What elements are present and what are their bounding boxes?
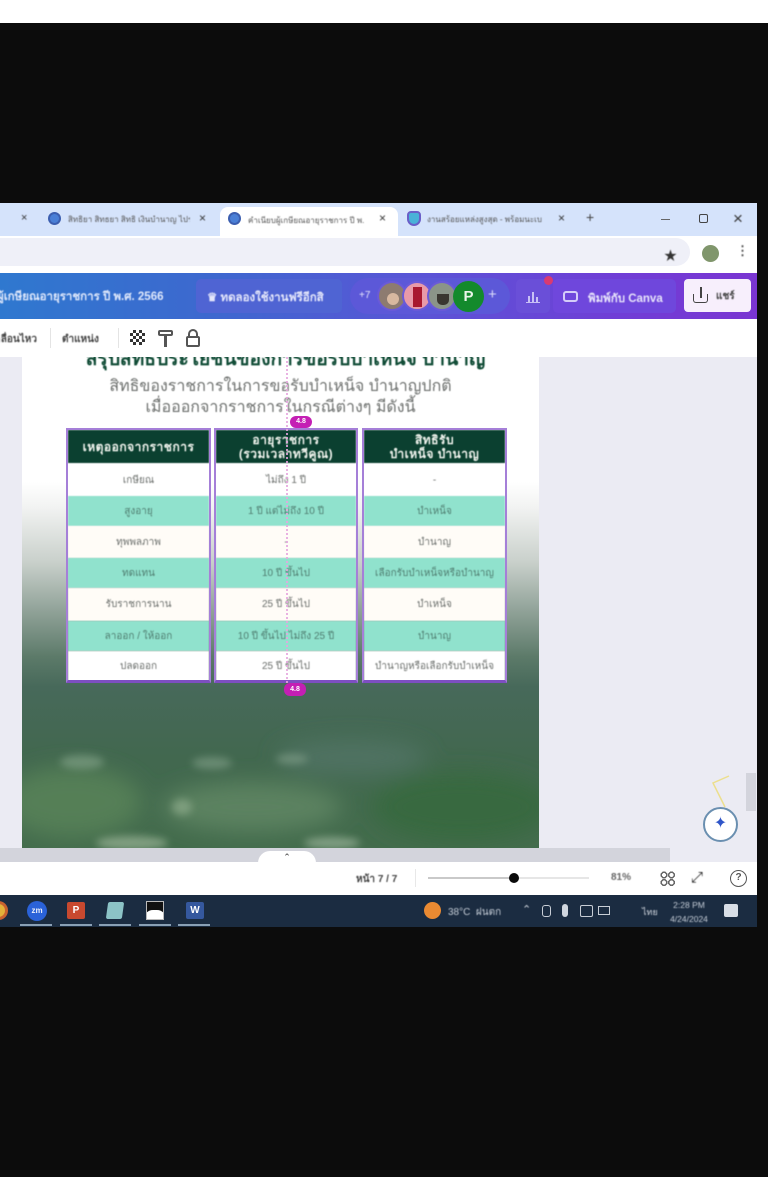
row 7: ปลดออก — [120, 660, 157, 672]
icon: weather — [424, 902, 441, 919]
row 1: เกษียณ — [123, 475, 154, 486]
header: entitlement — [364, 430, 505, 463]
clock: 2:28 PM — [673, 900, 705, 910]
print button — [553, 279, 676, 313]
scroll gutter — [0, 848, 670, 862]
header: entitlement: บำเหน็จ บำนาญ — [390, 446, 479, 460]
weather text: 38°C ฝนตก — [448, 907, 501, 918]
vertical scrollbar thumb — [746, 773, 756, 811]
row 2: บำเหน็จ — [417, 506, 452, 516]
row 6: ลาออก / ให้ออก — [105, 630, 172, 642]
footer bar — [0, 862, 757, 895]
icon: notes app — [106, 902, 124, 919]
subheading — [109, 376, 452, 416]
row 5: บำเหน็จ — [417, 599, 452, 610]
row 7: บำนาญหรือเลือกรับบำเหน็จ — [375, 660, 494, 672]
insights button — [516, 279, 550, 313]
toolbar label: position: ตำแหน่ง — [62, 334, 99, 345]
icon: help — [730, 870, 747, 887]
selection frame: column 3 — [362, 428, 507, 683]
windows taskbar — [0, 895, 757, 927]
canva header — [0, 273, 757, 319]
subheading: สิทธิของราชการในการขอรับบำเหน็จ บำนาญปกติ — [109, 378, 452, 395]
icon: powerpoint — [67, 902, 85, 919]
spacing badge: bottom — [284, 683, 306, 696]
icon: notification — [724, 904, 738, 917]
collaborators — [350, 278, 510, 314]
tab: active — [220, 207, 398, 236]
page collapse tab — [258, 851, 316, 863]
window controls: × — [733, 209, 743, 228]
row 7: 25 ปี ขึ้นไป — [262, 660, 310, 672]
header: reason — [68, 430, 209, 463]
icon: photos — [146, 901, 164, 920]
spacing badge: top — [290, 416, 312, 428]
system tray icons — [522, 904, 610, 917]
icon: zoom: zm — [31, 906, 43, 915]
print button: พิมพ์กับ Canva — [588, 293, 663, 305]
free trial button: ♛ ทดลองใช้งานฟรีอีกสิ — [207, 292, 324, 304]
address bar — [0, 236, 757, 273]
tab: active: คำเนียบผู้เกษียณอายุราชการ ปี พ. — [248, 216, 364, 225]
row 6: 10 ปี ขึ้นไป ไม่ถึง 25 ปี — [238, 630, 334, 642]
tab: second: × — [199, 211, 206, 225]
spacing badge: bottom: 4.8 — [290, 686, 300, 693]
row 6: บำนาญ — [418, 630, 451, 642]
icon: star: ★ — [664, 248, 677, 263]
system tray icons: ⌃ — [522, 904, 531, 916]
selection frame: column 2 — [214, 428, 358, 683]
page collapse tab: ⌃ — [283, 852, 291, 862]
header: service years: (รวมเวลาทวีคูณ) — [239, 446, 333, 460]
icon: powerpoint: P — [73, 905, 79, 916]
screen capture — [0, 203, 757, 927]
zoom slider — [428, 877, 589, 879]
icon: menu dots: ⋮ — [736, 243, 749, 258]
row 5: รับราชการนาน — [106, 599, 171, 610]
collaborators: + — [488, 286, 497, 303]
collaborators: P — [463, 288, 474, 305]
icon: fullscreen: ⤢ — [691, 869, 703, 886]
row 5: 25 ปี ขึ้นไป — [262, 599, 310, 610]
clock: 4/24/2024 — [670, 914, 708, 924]
notification dot — [544, 276, 553, 285]
header: reason: เหตุออกจากราชการ — [83, 440, 194, 454]
share button — [684, 279, 751, 312]
spacing guide line — [286, 357, 288, 687]
row 3: บำนาญ — [418, 536, 451, 548]
icon: grid view — [660, 871, 675, 886]
magic assistant button: ✦ — [714, 815, 727, 832]
zoom percent: 81% — [611, 872, 631, 883]
collaborators: +7 — [359, 290, 370, 301]
free trial button — [196, 279, 342, 313]
row 4: ทดแทน — [122, 568, 155, 578]
design page — [22, 357, 539, 848]
icon: zoom — [27, 901, 47, 921]
annotation stroke — [712, 775, 730, 808]
share button: แชร์ — [716, 291, 735, 302]
clock — [670, 900, 708, 924]
row 3: ทุพพลภาพ — [116, 536, 161, 548]
icon: chrome — [0, 901, 8, 920]
window controls — [661, 209, 743, 228]
subheading: เมื่อออกจากราชการในกรณีต่างๆ มีดังนี้ — [145, 398, 416, 416]
icon: help: ? — [735, 872, 742, 883]
tab: fourth: งานสร้อยแหล่งสูงสุด - พร้อมนะเบ — [427, 215, 542, 224]
icon: unlocked padlock — [186, 329, 200, 347]
bottom white strip — [0, 1177, 768, 1200]
tab: active: × — [379, 211, 386, 225]
header: service years: อายุราชการ — [252, 432, 320, 446]
spacing badge: top: 4.8 — [296, 418, 306, 425]
icon: word: W — [190, 905, 200, 916]
tab: second — [48, 211, 206, 225]
icon: transparency — [130, 330, 145, 345]
tab: first: × — [21, 212, 27, 224]
row 4: เลือกรับบำเหน็จหรือบำนาญ — [375, 568, 494, 578]
header: service years — [216, 430, 356, 463]
row 2: 1 ปี แต่ไม่ถึง 10 ปี — [248, 506, 324, 516]
selection frame: column 1 — [66, 428, 211, 683]
table — [66, 428, 507, 683]
magic assistant button — [703, 807, 738, 842]
new tab button: + — [586, 209, 594, 225]
tab: fourth: × — [558, 211, 565, 225]
row 1: ไม่ถึง 1 ปี — [266, 475, 306, 486]
row 2: สูงอายุ — [124, 506, 153, 516]
icon: paint roller — [158, 330, 173, 347]
icon: word — [186, 902, 204, 919]
input language: ไทย — [642, 907, 658, 917]
document title: ผู้เกษียณอายุราชการ ปี พ.ศ. 2566 — [0, 291, 164, 303]
top white strip — [0, 0, 768, 23]
icon: profile avatar — [702, 245, 719, 262]
row 1: - — [433, 475, 436, 486]
editor toolbar — [0, 319, 757, 357]
background photo: blurred meadow — [22, 739, 539, 848]
header: entitlement: สิทธิรับ — [415, 432, 454, 446]
tab: fourth — [407, 211, 565, 226]
page number: หน้า 7 / 7 — [356, 874, 397, 885]
row 4: 10 ปี ขึ้นไป — [262, 568, 310, 578]
browser tab bar — [0, 203, 757, 236]
row 3: - — [284, 536, 288, 548]
